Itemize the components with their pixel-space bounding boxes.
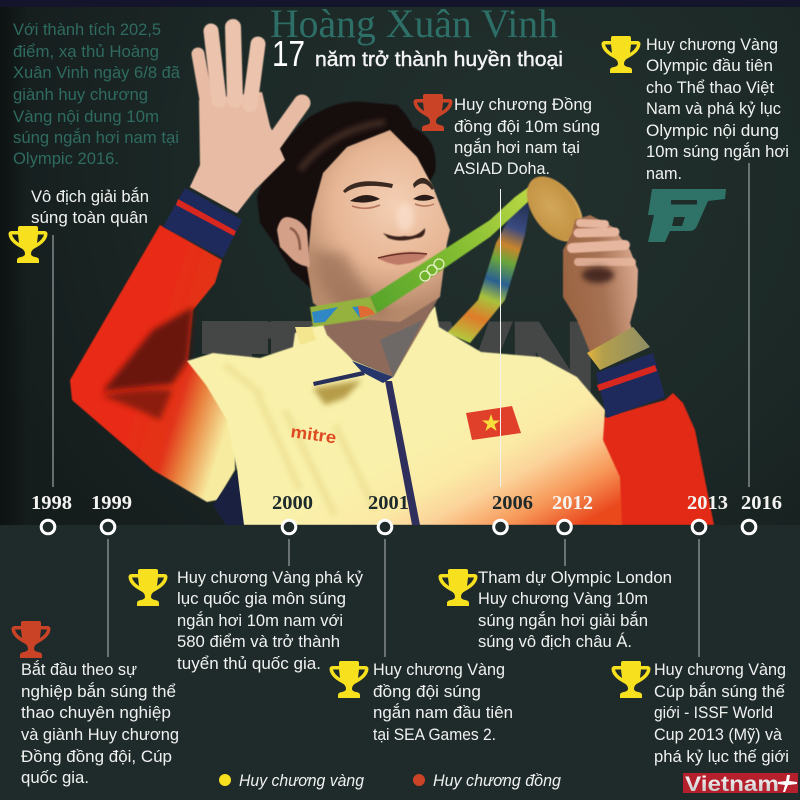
text: 2016: Olympic đầu tiên (646, 57, 773, 75)
text: 2016: nam. (646, 165, 682, 183)
text: 2006: ASIAD Doha. (454, 160, 550, 178)
arm shadow (103, 307, 193, 391)
collar shadow (313, 380, 362, 405)
ear (277, 217, 310, 267)
timeline years: 2000 (272, 492, 313, 514)
right hand (563, 215, 638, 352)
zipper (385, 381, 420, 525)
intro text: điểm, xạ thủ Hoàng (13, 43, 159, 61)
text: 2012: Huy chương Vàng 10m (478, 590, 648, 608)
timeline years: 2012 (552, 492, 593, 514)
text: 2016: Olympic nội dung (646, 122, 779, 140)
ring finger (211, 31, 219, 100)
text: 2001: tại SEA Games 2. (373, 726, 496, 744)
icon: trophy 2016 (602, 36, 640, 73)
text: 2016: cho Thể thao Việt (646, 79, 774, 97)
text: 2016: 10m súng ngắn hơi (646, 142, 789, 161)
left cuff stripe (176, 199, 236, 236)
olympic rings (420, 259, 444, 281)
stubble shadow (312, 250, 395, 318)
title (270, 1, 563, 74)
flag (466, 406, 521, 440)
text: 2006 (454, 96, 600, 178)
ribbon colour patch (310, 297, 377, 327)
right hand fingers (572, 223, 632, 262)
medal (515, 166, 595, 252)
ribbon patch orange (358, 306, 375, 318)
neck right shade (380, 320, 423, 377)
thumb (272, 103, 302, 145)
text: 1998 (31, 187, 149, 227)
raised left arm (70, 225, 235, 502)
text: 2000: Huy chương Vàng phá kỷ (177, 569, 364, 587)
photo background (0, 0, 800, 526)
jacket folds (225, 365, 375, 515)
index finger (250, 44, 258, 105)
timeline years: 1999 (91, 492, 132, 514)
intro text: Vàng nội dung 10m (13, 108, 159, 126)
text: 1999: thao chuyên nghiệp (21, 704, 171, 722)
nose (383, 228, 425, 240)
intro text: Với thành tích 202,5 (13, 21, 161, 39)
eye lids (352, 204, 434, 208)
title number: 17 (272, 33, 305, 74)
neck (312, 295, 440, 377)
palm (190, 92, 285, 213)
left cuff (163, 188, 242, 258)
left edge shadow (0, 7, 28, 526)
ear inner (290, 228, 300, 250)
logo: Vietnam+: Vietnam (685, 773, 779, 796)
flag star (482, 414, 500, 431)
nose highlight (396, 203, 414, 231)
text: 1999: Bắt đầu theo sự (21, 660, 137, 679)
text: 1999: nghiệp bắn súng thể (21, 682, 176, 701)
subtitle: năm trở thành huyền thoại (315, 48, 563, 71)
text: 1999 (21, 660, 179, 787)
timeline connectors (53, 163, 749, 657)
ribbon patch detail (312, 307, 374, 323)
text: 2001: Huy chương Vàng (373, 661, 505, 679)
watermark (202, 302, 596, 420)
lip line (378, 253, 427, 258)
icon: trophy 2006 bronze (414, 94, 452, 131)
icon: trophy 2012 (438, 569, 478, 606)
text: 2013: giới - ISSF World (654, 704, 773, 722)
collar tee (352, 361, 393, 383)
timeline years: 2016 (741, 492, 782, 514)
text: 2013: Huy chương Vàng (654, 661, 786, 679)
hair highlight (300, 122, 385, 170)
text: 2006: đồng đội 10m súng (454, 118, 600, 136)
text: 2012 (478, 569, 672, 651)
top strip (0, 0, 800, 7)
timeline years: 2006 (492, 492, 533, 514)
timeline markers (41, 520, 756, 534)
text: 2013: Cúp bắn súng thế (654, 682, 785, 701)
icon: trophy 2000 (128, 569, 168, 606)
text: 1999: Đồng đồng đội, Cúp (21, 748, 172, 766)
raised hand (190, 27, 302, 213)
watch (587, 327, 650, 370)
main medal ribbon (370, 186, 530, 313)
text: 2000: ngắn hơi 10m nam với (177, 611, 343, 630)
intro text: Xuân Vinh ngày 6/8 đã (13, 64, 181, 82)
watermark text: TTXVN (204, 302, 596, 420)
legend: bronze marker (413, 774, 425, 786)
text: 2016: Nam và phá kỷ lục (646, 100, 781, 118)
legend: gold label: Huy chương vàng (239, 772, 365, 790)
arm fold shadow (102, 390, 172, 420)
right cuff (596, 353, 665, 418)
face (307, 130, 450, 322)
text: 2013: phá kỷ lục thế giới (654, 748, 789, 766)
icon: pistol (648, 189, 726, 242)
bottom panel (0, 525, 800, 800)
intro text: Olympic 2016. (13, 150, 119, 168)
legend: gold marker (219, 774, 231, 786)
icon: trophy 2001 (330, 661, 368, 698)
dark underarm (213, 470, 244, 525)
intro text: súng ngắn hơi nam tại (13, 128, 179, 147)
text: 2012: Tham dự Olympic London (478, 569, 672, 587)
text: 2000: tuyển thủ quốc gia. (177, 655, 321, 673)
text: 2016 (646, 36, 789, 183)
text: 2001: ngắn nam đầu tiên (373, 703, 513, 722)
text: 1998: Vô địch giải bắn (31, 187, 149, 206)
icon: trophy 1998 (8, 226, 48, 263)
text: 2006: ngắn hơi nam tại (454, 138, 580, 157)
text: 2000 (177, 569, 364, 673)
eyes (350, 195, 435, 203)
text: 2012: súng ngắn hơi giải bắn (478, 611, 648, 630)
right sleeve (600, 393, 714, 525)
icon: trophy 2013 (612, 661, 650, 698)
legend: bronze label: Huy chương đồng (433, 772, 562, 790)
timeline years: 2001 (368, 492, 409, 514)
intro text: giành huy chương (13, 86, 148, 104)
text: 1998: súng toàn quân (31, 209, 148, 227)
title name: Hoàng Xuân Vinh (270, 1, 558, 46)
icon: trophy 1999 bronze (12, 621, 50, 658)
text: 2001 (373, 661, 513, 744)
logo plus sign (778, 775, 797, 792)
pinky (198, 54, 207, 105)
legend (219, 772, 562, 790)
text: 2016: Huy chương Vàng (646, 36, 778, 54)
left wrist (190, 170, 260, 213)
logo: mitre: mitre (289, 422, 338, 447)
collar stripe (313, 371, 365, 386)
text: 2006: Huy chương Đồng (454, 96, 592, 114)
jacket body (187, 306, 622, 525)
text: 1999: và giành Huy chương (21, 726, 179, 744)
second medal ribbon (447, 200, 530, 343)
photo: athlete (70, 27, 714, 525)
eyebrows (343, 178, 434, 193)
timeline years (31, 492, 782, 514)
timeline years: 2013 (687, 492, 728, 514)
text: 2001: đồng đội súng (373, 683, 481, 701)
right cuff stripe (597, 365, 657, 391)
text: 2013 (654, 661, 789, 766)
collar tip (295, 327, 316, 345)
text: 2000: 580 điểm và trở thành (177, 633, 340, 651)
hair (257, 102, 436, 290)
text: 2000: lục quốc gia môn súng (177, 590, 346, 608)
text: 2012: súng vô địch châu Á. (478, 632, 632, 651)
intro text (13, 21, 181, 168)
mouth (378, 252, 427, 265)
timeline years: 1998 (31, 492, 72, 514)
middle finger (233, 27, 235, 100)
palm shadow (582, 267, 614, 283)
text: 2013: Cup 2013 (Mỹ) và (654, 726, 783, 744)
text: 1999: quốc gia. (21, 769, 89, 787)
